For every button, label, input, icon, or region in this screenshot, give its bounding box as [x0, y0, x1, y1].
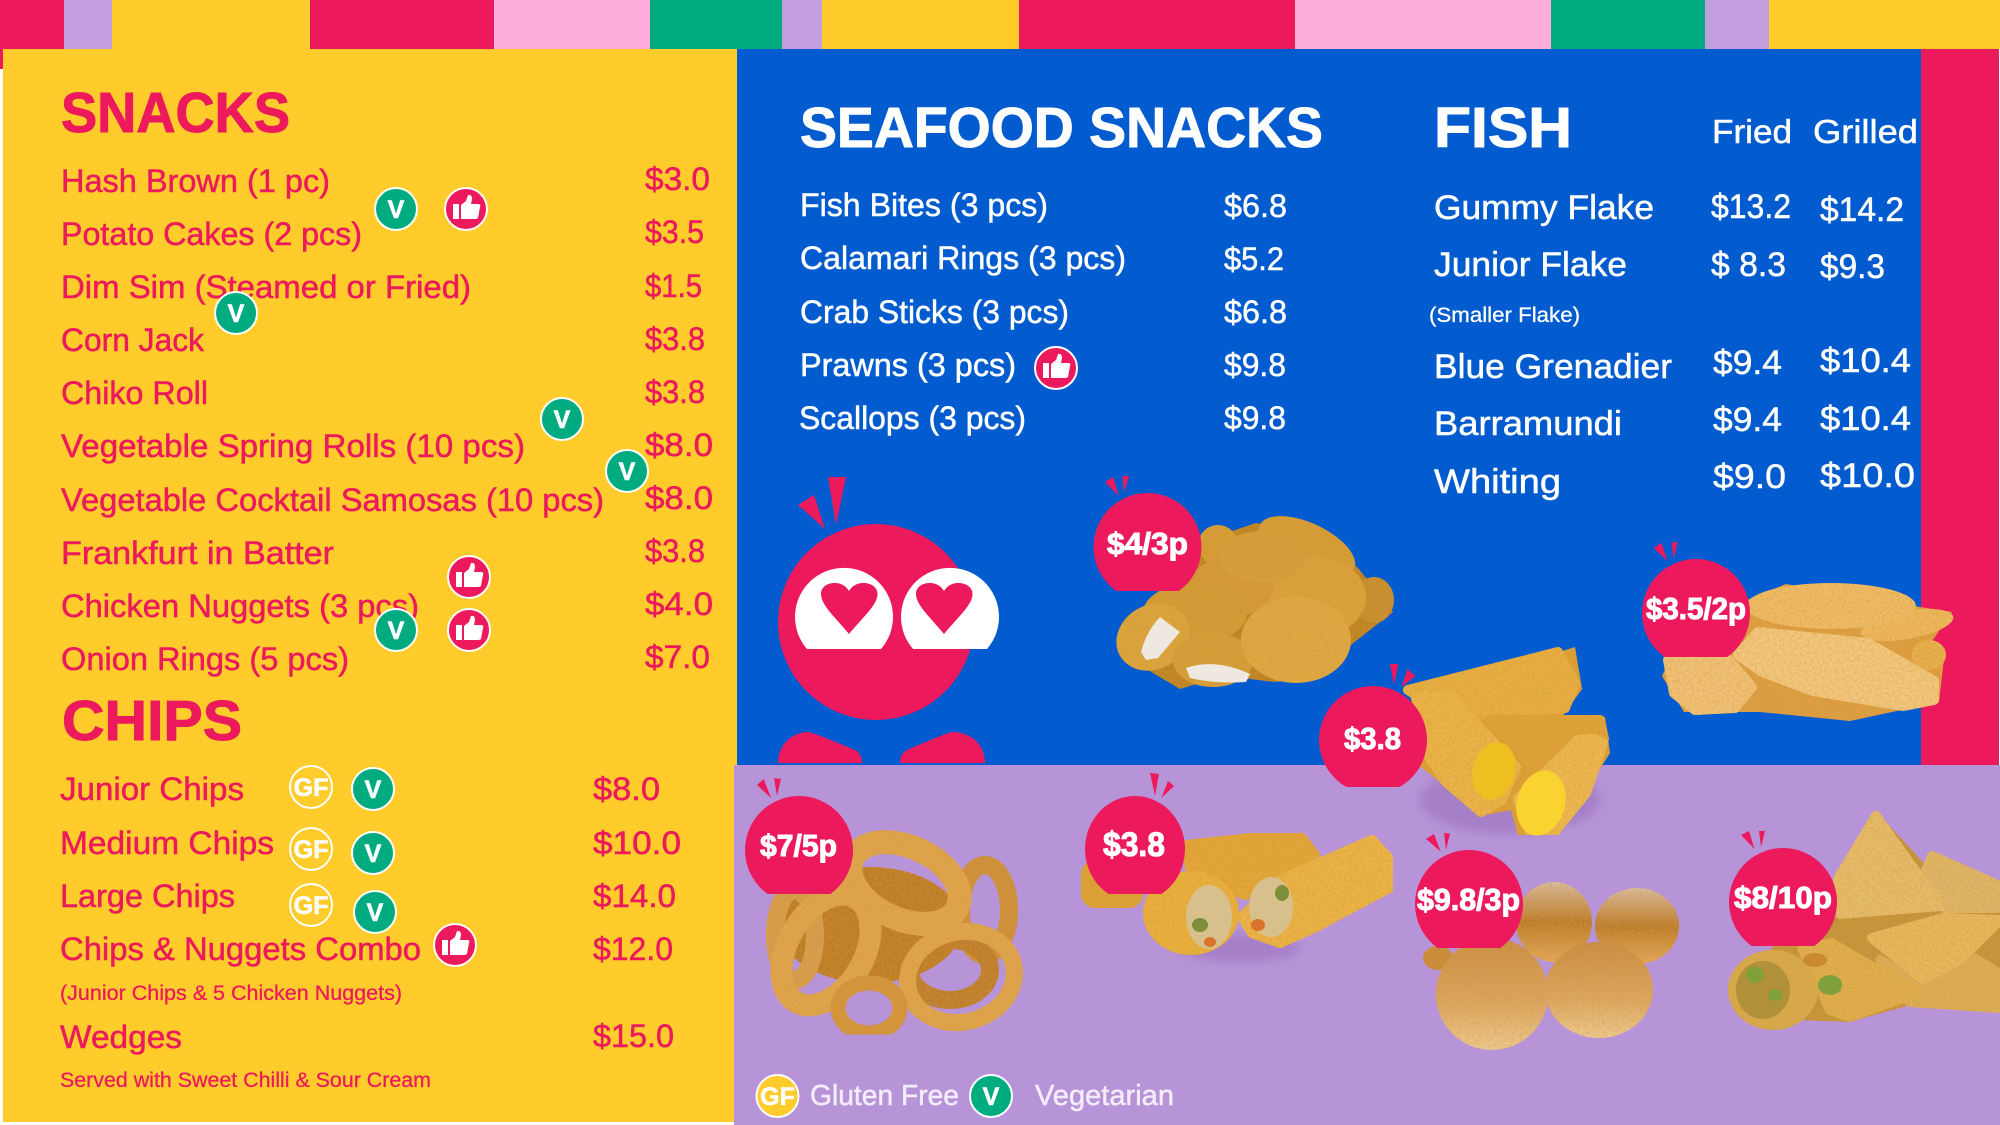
chips prices: $14.0: [593, 878, 676, 914]
icon: thumbs up nuggets: [448, 556, 490, 598]
price tag: scallops: $9.8/3p: [1417, 882, 1520, 917]
price tag: potato cakes: [1642, 542, 1750, 657]
snacks list: Chicken Nuggets (3 pcs): [61, 588, 419, 624]
legend label: vegetarian: Vegetarian: [1035, 1080, 1174, 1112]
price tag: corn jack: [1319, 664, 1427, 787]
icon: vegetarian onion rings: V: [388, 617, 405, 645]
panel: lilac food area: [734, 765, 2000, 1125]
icon: gluten free junior chips: [290, 766, 332, 808]
icon: gluten free large chips: GF: [294, 892, 328, 920]
seafood prices: $9.8: [1224, 400, 1286, 436]
chips prices: $8.0: [593, 771, 660, 807]
fish column headings: Fried: [1712, 113, 1792, 150]
chips prices: $15.0: [593, 1018, 674, 1054]
food: samosas: [1728, 811, 2000, 1030]
fish list: Barramundi: [1434, 405, 1622, 443]
chips prices: $12.0: [593, 931, 673, 967]
price tag: chicken nuggets: [1094, 476, 1202, 591]
fish prices: $ 8.3: [1711, 246, 1786, 284]
chips heading: CHIPS: [62, 689, 242, 753]
icon: vegetarian potato cakes: [375, 188, 417, 230]
icon: thumbs up onion rings: [448, 609, 490, 651]
fish prices: $10.0: [1820, 457, 1915, 495]
snacks list: [61, 163, 604, 677]
fish prices: $9.4: [1713, 401, 1782, 439]
fish prices: $9.3: [1820, 248, 1885, 286]
icon: gluten free medium chips: [290, 828, 332, 870]
snacks prices: $3.5: [645, 214, 704, 250]
price tag: frankfurt: $3.8: [1103, 826, 1165, 864]
icon: thumbs up combo: [434, 924, 476, 966]
snacks list: Potato Cakes (2 pcs): [61, 216, 362, 252]
chips list: Wedges: [60, 1019, 182, 1055]
icon: vegetarian medium chips: V: [365, 840, 382, 868]
icon: vegetarian medium chips: [352, 832, 394, 874]
icon: vegetarian junior chips: [352, 768, 394, 810]
snacks heading: SNACKS: [61, 81, 290, 145]
fish list: Whiting: [1434, 463, 1561, 501]
icon: gluten free medium chips: GF: [294, 836, 328, 864]
snacks list: Onion Rings (5 pcs): [61, 641, 349, 677]
seafood prices: $6.8: [1224, 188, 1287, 224]
seafood prices: [1224, 188, 1287, 436]
icon: thumbs up potato cakes: [445, 188, 487, 230]
fish list: [1429, 189, 1672, 501]
snacks prices: $1.5: [645, 268, 702, 304]
price tag: scallops: [1415, 833, 1523, 948]
snacks prices: $8.0: [645, 480, 713, 516]
panel: snacks and chips background: [3, 49, 737, 1122]
snacks prices: [645, 161, 713, 675]
fish prices: $13.2: [1711, 188, 1791, 226]
fish prices: $10.4: [1820, 400, 1911, 438]
snacks prices: $3.8: [645, 533, 705, 569]
food: fish fillets: [1662, 583, 1956, 721]
fish list: Gummy Flake: [1434, 189, 1654, 227]
food: chicken nuggets: [1104, 503, 1394, 689]
food: onion rings: [763, 826, 1025, 1034]
icon: vegetarian legend: [970, 1075, 1012, 1117]
snacks prices: $8.0: [645, 427, 713, 463]
seafood list: Scallops (3 pcs): [799, 400, 1026, 436]
legend label: gluten free: Gluten Free: [810, 1080, 959, 1112]
chips list: Medium Chips: [60, 825, 274, 861]
seafood list: Prawns (3 pcs): [800, 347, 1016, 383]
chips list: (Junior Chips & 5 Chicken Nuggets): [60, 982, 402, 1005]
seafood list: Crab Sticks (3 pcs): [800, 294, 1069, 330]
chips list: Large Chips: [60, 878, 235, 914]
seafood prices: $6.8: [1224, 294, 1287, 330]
chips list: Chips & Nuggets Combo: [60, 931, 421, 967]
icon: vegetarian corn jack: V: [228, 300, 245, 328]
seafood prices: $5.2: [1224, 241, 1284, 277]
fish heading: FISH: [1434, 96, 1572, 160]
snacks prices: $3.0: [645, 161, 710, 197]
chips list: Junior Chips: [60, 771, 244, 807]
price tag: potato cakes: $3.5/2p: [1646, 591, 1746, 626]
fish prices: $14.2: [1820, 191, 1904, 229]
fish list: Blue Grenadier: [1434, 348, 1672, 386]
seafood snacks heading: SEAFOOD SNACKS: [800, 96, 1323, 160]
price tag: onion rings: $7/5p: [760, 828, 837, 863]
fish prices: $10.4: [1820, 342, 1911, 380]
snacks prices: $3.8: [645, 374, 705, 410]
price tag: frankfurt: [1085, 773, 1185, 894]
fish prices: $9.0: [1713, 458, 1786, 496]
food: corn jacks: [1403, 647, 1610, 841]
snacks prices: $7.0: [645, 639, 710, 675]
icon: gluten free legend: GF: [760, 1083, 795, 1111]
icon: vegetarian corn jack: [215, 292, 257, 334]
fish list: Junior Flake: [1434, 246, 1627, 284]
legend: [756, 1075, 1174, 1117]
food: frankfurts in batter: [1081, 833, 1393, 962]
snacks prices: $4.0: [645, 586, 713, 622]
fish list: (Smaller Flake): [1429, 304, 1580, 327]
snacks list: Vegetable Cocktail Samosas (10 pcs): [61, 482, 604, 518]
fish column headings: [1712, 113, 1918, 150]
icon: gluten free junior chips: GF: [294, 774, 328, 802]
snacks list: Hash Brown (1 pc): [61, 163, 330, 199]
icon: vegetarian spring rolls: [541, 398, 583, 440]
icon: thumbs up prawns: [1035, 347, 1077, 389]
icon: vegetarian samosas: V: [619, 458, 636, 486]
snacks list: Dim Sim (Steamed or Fried): [61, 269, 471, 305]
chips prices: [593, 771, 681, 1054]
fish column headings: Grilled: [1813, 113, 1918, 150]
icon: vegetarian large chips: V: [367, 899, 384, 927]
price tag: onion rings: [745, 778, 853, 894]
price tag: samosas: $8/10p: [1734, 880, 1832, 915]
top colour bar: [0, 0, 2000, 69]
icon: vegetarian spring rolls: V: [554, 406, 571, 434]
panel: red right strip: [1921, 49, 1999, 765]
icon: vegetarian samosas: [606, 450, 648, 492]
icon: vegetarian onion rings: [375, 609, 417, 651]
panel: seafood and fish background: [737, 49, 1921, 765]
chips list: [60, 771, 431, 1092]
snacks prices: $3.8: [645, 321, 705, 357]
price tag: samosas: [1729, 831, 1837, 946]
chips prices: $10.0: [593, 825, 681, 861]
seafood list: Fish Bites (3 pcs): [800, 187, 1048, 223]
snacks list: Frankfurt in Batter: [61, 535, 334, 571]
snacks list: Chiko Roll: [61, 375, 208, 411]
seafood list: Calamari Rings (3 pcs): [800, 240, 1126, 276]
icon: vegetarian junior chips: V: [365, 776, 382, 804]
icon: gluten free large chips: [290, 884, 332, 926]
icon: vegetarian large chips: [354, 891, 396, 933]
icon: gluten free legend: [756, 1075, 798, 1117]
fish prices: [1711, 188, 1915, 496]
seafood list: [799, 187, 1126, 436]
fish prices: $9.4: [1713, 344, 1782, 382]
snacks list: Vegetable Spring Rolls (10 pcs): [61, 428, 525, 464]
icon: vegetarian legend: V: [983, 1083, 1000, 1111]
food: scallops: [1423, 882, 1679, 1050]
nugget cut faces: [1141, 617, 1250, 682]
seafood prices: $9.8: [1224, 347, 1286, 383]
icon: vegetarian potato cakes: V: [388, 196, 405, 224]
chips list: Served with Sweet Chilli & Sour Cream: [60, 1069, 431, 1092]
price tag: corn jack: $3.8: [1344, 721, 1401, 756]
price tag: chicken nuggets: $4/3p: [1107, 526, 1188, 561]
mascot: [778, 477, 999, 763]
snacks list: Corn Jack: [61, 322, 205, 358]
